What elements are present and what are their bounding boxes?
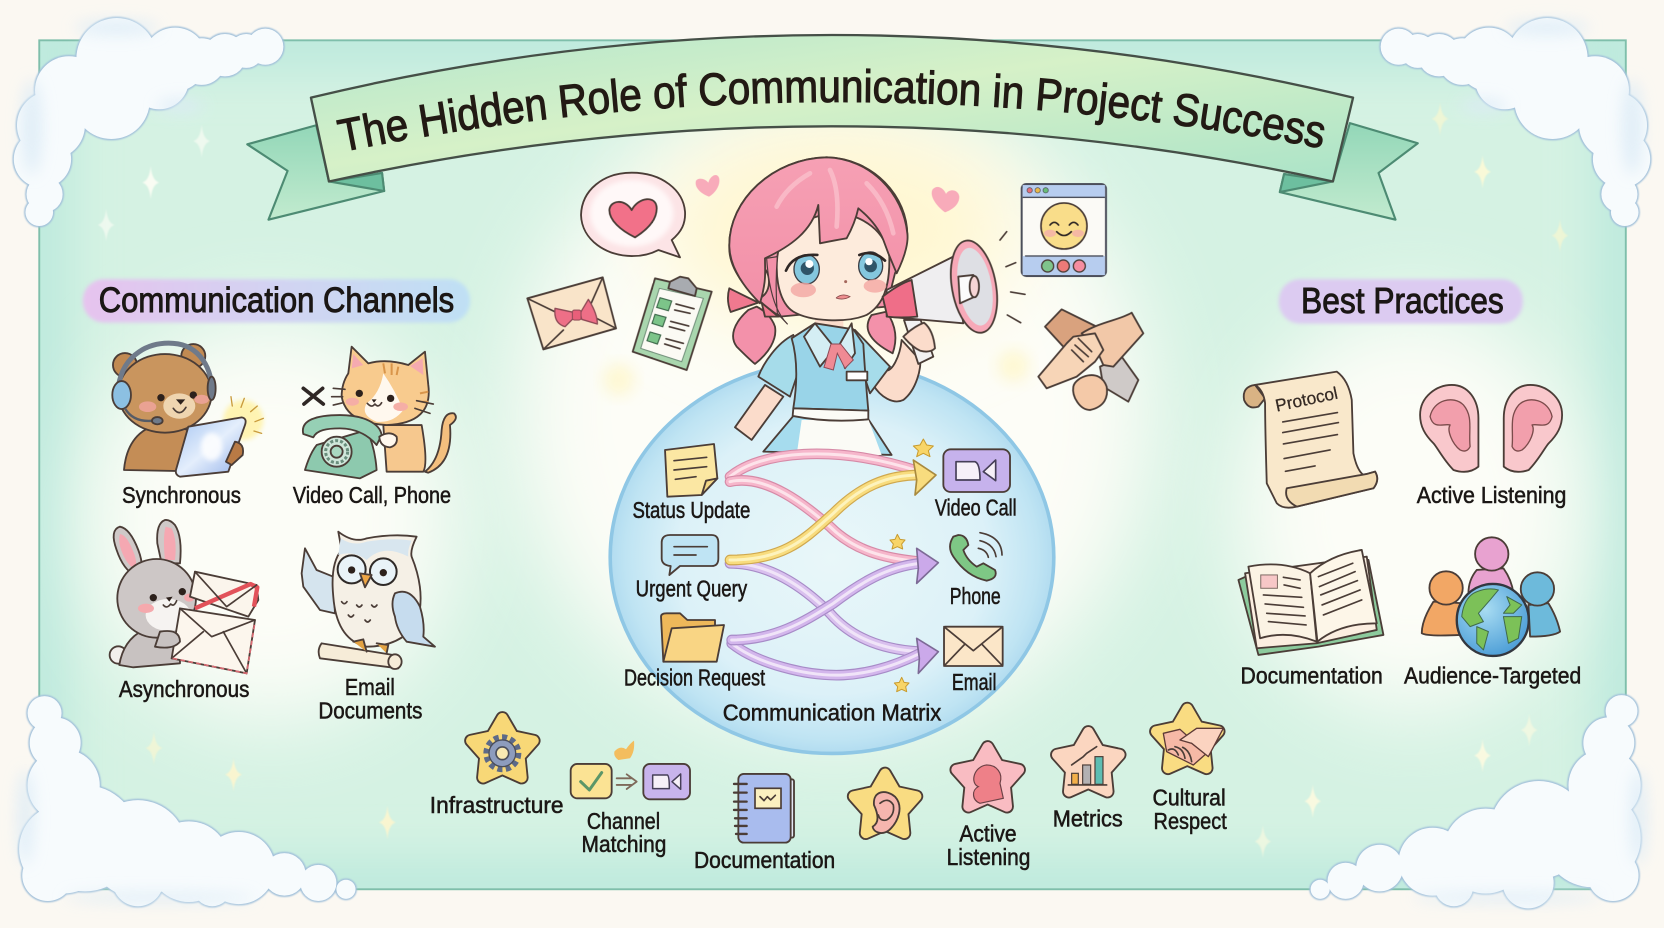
label: Active Listening: Active — [959, 821, 1017, 847]
label: Channel Matching: Channel — [587, 808, 660, 834]
label: Communication Matrix: Communication Matrix — [723, 700, 942, 726]
matrix: arrows and icons — [661, 439, 1010, 692]
label: Channel Matching — [582, 808, 666, 857]
arrow: status update to video call — [730, 454, 920, 477]
label: Channel Matching: Matching — [582, 831, 666, 857]
label: Phone: Phone — [950, 583, 1001, 609]
label: Email: Email — [952, 669, 996, 695]
cloud: top left — [14, 18, 283, 226]
icon: speech bubble with heart — [581, 173, 685, 257]
communication matrix bubble — [610, 361, 1054, 753]
label: Infrastructure: Infrastructure — [430, 792, 564, 818]
bottom row details (left) — [486, 737, 794, 843]
arrow: urgent query to video call — [730, 460, 936, 560]
central girl with megaphone — [728, 157, 1004, 455]
icon: video tile — [943, 449, 1010, 492]
label: Audience-Targeted: Audience-Targeted — [1404, 662, 1581, 688]
title: The Hidden Role of Communication in Project Success — [336, 68, 1324, 150]
label: Email Documents: Documents — [318, 697, 422, 723]
icon: stacked hands — [1038, 309, 1143, 410]
star badge: ear — [854, 774, 916, 833]
label: Cultural Respect: Respect — [1154, 808, 1227, 834]
neck — [815, 317, 843, 332]
banner left tail — [247, 125, 384, 220]
skirt — [763, 416, 892, 455]
label: Decision Request: Decision Request — [624, 665, 766, 691]
face — [777, 213, 889, 320]
arrow: decision request to email — [732, 638, 938, 675]
banner band — [311, 35, 1353, 181]
hair back — [729, 157, 907, 317]
arrow — [617, 774, 637, 789]
apron — [797, 419, 882, 455]
heading pill: Best Practices: Best Practices — [1301, 280, 1504, 321]
sound rays — [1000, 232, 1025, 323]
cheeks — [791, 279, 886, 297]
star badge: Active Listening — [956, 747, 1019, 807]
right pigtail — [868, 312, 895, 353]
open book — [1238, 550, 1383, 655]
icon: envelope — [944, 627, 1003, 666]
banner right fold — [1280, 174, 1333, 192]
decorative arrow stars — [890, 439, 933, 692]
star badge: Metrics — [1057, 732, 1120, 792]
ear — [873, 792, 900, 833]
banner left fold — [329, 173, 384, 191]
arrow: status update to phone — [730, 480, 920, 562]
bangs — [729, 157, 908, 303]
banner right tail — [1280, 123, 1418, 220]
arrow: urgent query to email — [730, 563, 920, 652]
gear — [486, 737, 518, 769]
soft yellow glows — [603, 350, 1029, 396]
label: Documentation: Documentation — [694, 847, 835, 873]
side strand — [767, 257, 787, 324]
icon: sticky note — [665, 444, 717, 497]
label: Email Documents: Email — [345, 674, 395, 700]
left arm — [735, 385, 783, 440]
label: Email Documents — [318, 674, 422, 723]
best practices illustrations — [1238, 372, 1562, 656]
label: Metrics: Metrics — [1053, 806, 1123, 832]
heading pill: Communication Channels: Communication Channels — [99, 281, 454, 320]
cloud: bottom left — [17, 696, 356, 906]
icon: small right heart — [932, 187, 959, 212]
title banner — [246, 34, 1419, 221]
label: Active Listening: Listening — [947, 844, 1030, 870]
check tile — [571, 764, 612, 798]
label: Synchronous: Synchronous — [122, 482, 241, 508]
label: Active Listening: Active Listening — [1417, 482, 1566, 508]
icon: video call window — [1022, 184, 1106, 276]
protocol scroll — [1244, 372, 1377, 508]
icon: small heart — [696, 175, 719, 197]
label: Video Call: Video Call — [935, 495, 1017, 521]
rabbit with envelopes — [110, 520, 258, 673]
icon: clipboard checklist — [633, 277, 712, 370]
label: Cultural Respect: Cultural — [1152, 784, 1226, 810]
label: Asynchronous: Asynchronous — [119, 676, 249, 702]
cloud: bottom right — [1311, 695, 1647, 908]
icon: folder — [661, 613, 724, 662]
icon: phone — [950, 533, 1002, 581]
megaphone — [883, 237, 1004, 364]
ear — [748, 266, 769, 298]
label: Active Listening — [947, 821, 1030, 870]
star badge: Infrastructure — [471, 718, 534, 778]
label: Documentation: Documentation — [1241, 662, 1383, 688]
bear with headset and tablet — [112, 343, 263, 477]
right arm — [873, 340, 920, 401]
label: Cultural Respect — [1152, 784, 1227, 834]
icon: envelope with bow — [527, 277, 616, 349]
butterfly — [614, 741, 634, 760]
label: Video Call, Phone: Video Call, Phone — [293, 482, 451, 508]
cat with rotary phone — [303, 347, 456, 478]
people with globe — [1422, 537, 1560, 656]
nose and mouth — [836, 280, 850, 299]
owl with scroll — [302, 532, 435, 669]
protocol scroll: Protocol — [1273, 383, 1340, 416]
dress — [758, 323, 890, 421]
bottom row details (right) — [873, 728, 1223, 833]
left eye — [786, 255, 819, 284]
floating icons (left of girl) — [527, 173, 719, 370]
left pigtail and bow — [728, 288, 778, 364]
head silhouette — [974, 765, 1003, 803]
ears — [1420, 385, 1562, 472]
decorative sparkles — [98, 102, 1568, 858]
handshake — [1163, 728, 1223, 765]
floating icons (right of girl) — [1000, 184, 1143, 410]
label: Status Update: Status Update — [632, 497, 750, 523]
star badge: Cultural Respect — [1156, 709, 1219, 768]
notebook — [734, 774, 794, 843]
right eye — [859, 252, 885, 280]
bar chart — [1068, 747, 1107, 785]
icon: chat bubble — [662, 535, 718, 575]
arrow: decision request to phone — [732, 548, 938, 640]
hair highlights — [777, 170, 893, 233]
label: Urgent Query: Urgent Query — [636, 575, 747, 601]
channel illustrations (left) — [110, 343, 456, 673]
video tile — [643, 764, 690, 799]
cloud: top right — [1381, 18, 1650, 226]
